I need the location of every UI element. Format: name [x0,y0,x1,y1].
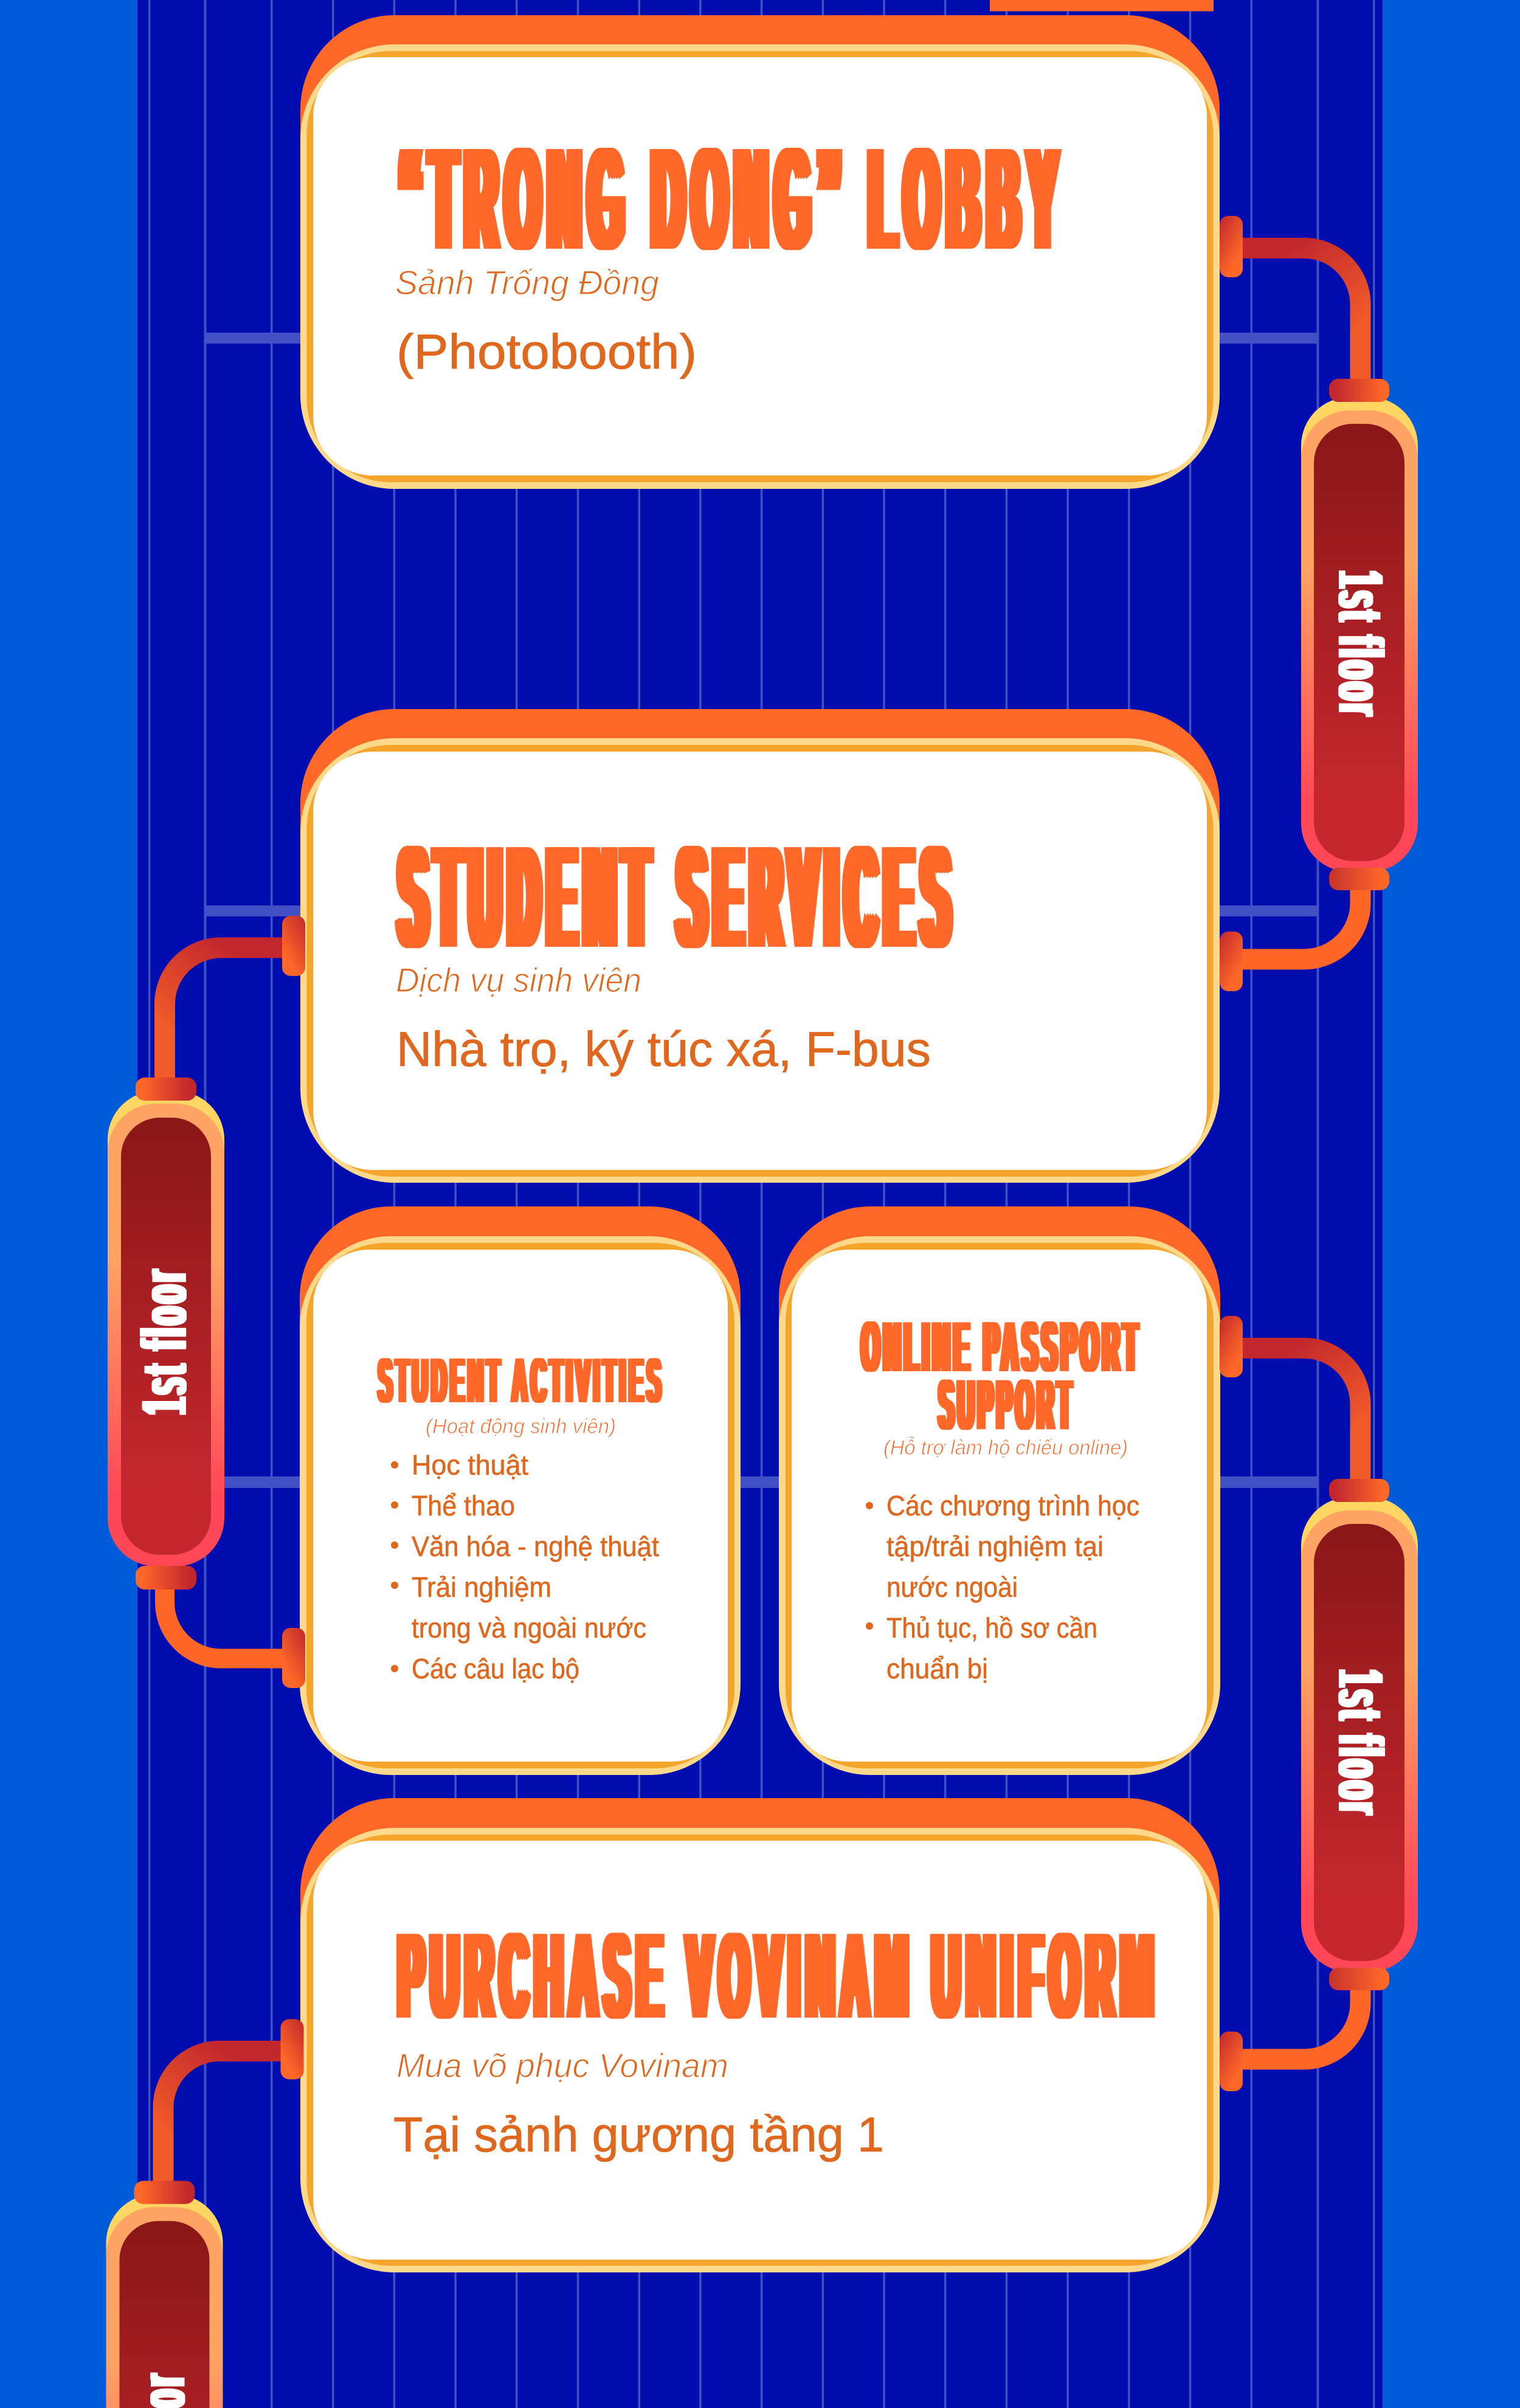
heading: “TRONG DONG” LOBBY [399,119,1066,280]
capsule label: 1st floor [1325,1670,1396,1818]
bullet list: Thủ tục, hồ sơ cần [886,1612,1097,1644]
subtitle: Mua võ phục Vovinam [396,2046,728,2085]
bullet list [391,1449,659,1684]
heading [862,1307,1141,1445]
panel: student services [300,709,1220,1183]
bullet list: nước ngoài [886,1571,1018,1603]
heading: SUPPORT [939,1365,1075,1445]
bullet list: Học thuật [412,1449,528,1481]
connector: left bottom capsule [106,2019,304,2408]
top orange tab [990,0,1214,11]
bullet list: trong và ngoài nước [412,1612,646,1644]
bullet list: Các chương trình học [886,1490,1139,1521]
bullet list [866,1490,1139,1684]
heading: PURCHASE VOVINAM UNIFORM [398,1909,1160,2044]
bullet list: tập/trải nghiệm tại [886,1531,1104,1562]
panel: purchase Vovinam uniform [300,1798,1220,2272]
connector: left student services capsule [108,916,305,1688]
subtitle: (Hoạt động sinh viên) [426,1415,616,1438]
bullet list: chuẩn bị [886,1653,988,1684]
body text: (Photobooth) [396,325,697,379]
subtitle: (Hỗ trợ làm hộ chiếu online) [883,1436,1128,1459]
panel: Trong Dong lobby [300,15,1220,489]
capsule label: 1st floor [129,1267,200,1414]
heading: STUDENT SERVICES [399,817,958,978]
subtitle: Dịch vụ sinh viên [396,961,641,999]
capsule label: 1st floor [1325,571,1396,719]
connector: right upper floor capsule [1220,216,1418,991]
panel: student activities [300,1206,741,1775]
subtitle: Sảnh Trống Đồng [395,263,659,302]
body text: Tại sảnh gương tầng 1 [393,2108,884,2162]
connector: right lower floor capsule [1220,1316,1418,2091]
bullet list: Trải nghiệm [412,1571,551,1603]
bullet list: Văn hóa - nghệ thuật [412,1531,659,1562]
body text: Nhà trọ, ký túc xá, F-bus [396,1022,931,1077]
heading: ONLINE PASSPORT [862,1307,1141,1387]
heading: STUDENT ACTIVITIES [378,1346,665,1416]
capsule label: or [128,2371,199,2408]
panel: online passport support [779,1206,1220,1775]
bullet list: Các câu lạc bộ [412,1653,579,1684]
bullet list: Thể thao [412,1490,515,1521]
